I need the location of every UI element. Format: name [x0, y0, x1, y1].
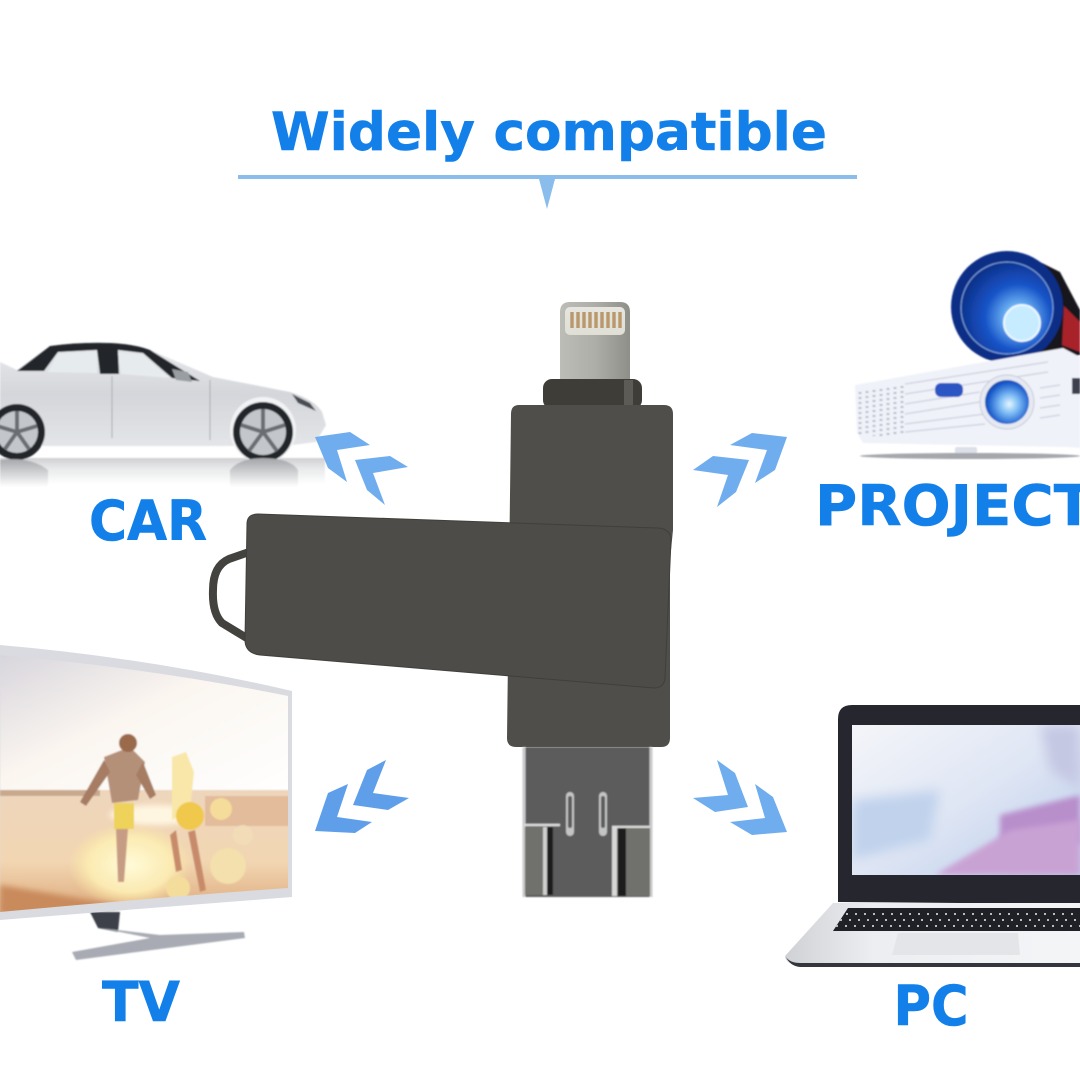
swivel cover — [245, 514, 671, 688]
tv illustration — [0, 645, 292, 960]
usb drive — [213, 302, 673, 897]
keyboard — [833, 908, 1080, 931]
arrows: projector — [693, 433, 787, 507]
title: Widely compatible — [271, 102, 827, 163]
tv screen — [0, 650, 290, 920]
laptop screen — [852, 725, 1080, 875]
car label: CAR — [89, 489, 207, 553]
arrows: pc — [693, 760, 787, 835]
tv stand — [72, 912, 245, 960]
projector illustration — [855, 251, 1080, 459]
tv label: TV — [102, 970, 180, 1034]
pc label: PC — [894, 974, 968, 1038]
laptop base — [785, 903, 1080, 965]
rear body — [507, 405, 673, 747]
lightning connector — [543, 302, 642, 409]
usb connector — [523, 747, 652, 897]
key ring loop — [213, 551, 252, 640]
car illustration — [0, 343, 326, 487]
arrows: tv — [315, 760, 409, 833]
title rule with pointer — [238, 175, 857, 209]
tv frame — [0, 645, 292, 920]
laptop lid — [838, 705, 1080, 904]
arrows: car — [315, 432, 408, 505]
laptop illustration — [785, 705, 1080, 967]
projector label: PROJECT — [815, 474, 1080, 539]
